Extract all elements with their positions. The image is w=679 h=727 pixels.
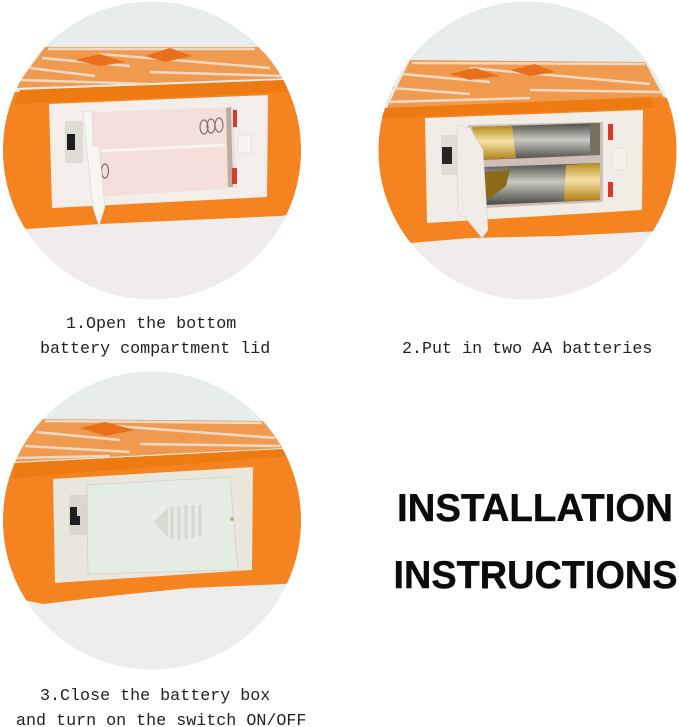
title: INSTALLATION [397,487,673,530]
open lid [457,125,488,238]
device orange body [0,449,310,604]
open lid [83,111,105,226]
mounting hole [230,517,234,521]
title [394,487,678,597]
battery bay panel [53,467,253,583]
caption: step 3: 3.Close the battery box [40,687,270,706]
device top grille [385,60,665,112]
open compartment [91,107,237,197]
device orange body [370,97,679,243]
caption: step 1: battery compartment lid [40,340,270,359]
battery top [472,123,600,160]
photo: step 1, open battery compartment [0,0,310,305]
photo: step 3, closed battery box [0,370,310,675]
switch [65,121,83,163]
title: INSTRUCTIONS [394,554,678,597]
red terminals [232,110,237,184]
device orange body [0,80,310,229]
springs [94,118,223,178]
caption: step 2: 2.Put in two AA batteries [402,340,652,359]
switch [69,495,87,535]
red terminals [608,124,613,197]
mounting tab [238,135,251,153]
caption: step 1 [40,315,270,359]
metal contacts [226,107,233,187]
switch [441,135,458,175]
battery bay panel [425,110,643,223]
battery bottom [482,163,600,205]
lid grip ridges [154,505,200,540]
device top grille [15,47,290,88]
photo: step 2, insert batteries [370,0,679,305]
caption: step 3 [16,687,306,727]
compartment [468,122,603,208]
mounting tab [612,148,627,170]
caption: step 1: 1.Open the bottom [66,315,236,334]
device top grille [10,419,285,462]
battery bay panel [49,95,268,208]
closed lid [87,477,238,574]
